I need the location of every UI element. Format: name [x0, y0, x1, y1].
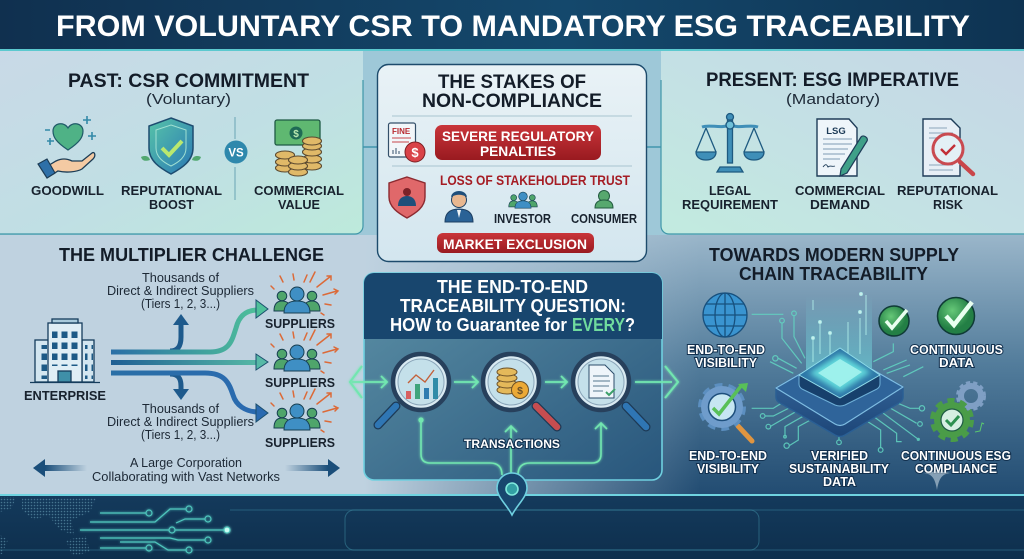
arrow: to lower suppliers: [111, 373, 268, 422]
panel: the multiplier challenge: [24, 245, 340, 484]
label: suppliers lower: SUPPLIERS: [265, 436, 335, 450]
panel: the stakes of non-compliance: [378, 64, 646, 262]
chart: central chip with circuit traces: [752, 292, 925, 452]
arrow: to upper suppliers: [111, 300, 268, 352]
callout: severe regulatory penalties: SEVERE REGULATORY: [442, 128, 595, 144]
text: thousands of suppliers, lower: (Tiers 1, 2, 3...): [141, 428, 220, 442]
icon: cash and coins: $: [293, 129, 299, 140]
circuit lines: [80, 506, 230, 553]
icon: fine document: [388, 123, 425, 162]
icon: fine document: $: [411, 145, 419, 160]
header band: [0, 0, 1024, 51]
label: end-to-end visibility lower: END-TO-END: [689, 449, 767, 463]
subheading: voluntary: (Voluntary): [146, 91, 231, 108]
arrow: right fade: [285, 459, 340, 477]
heading: loss of stakeholder trust: LOSS OF STAKEHOLDER TRUST: [440, 173, 631, 188]
arrow: branch up: [170, 314, 189, 351]
arrows: circuit feed from pin: [419, 418, 607, 475]
icon: cash and coins: [275, 120, 322, 176]
label: continuous ESG compliance: CONTINUOUS ESG: [901, 449, 1011, 463]
heading: stakes: THE STAKES OF: [438, 71, 586, 93]
heading: question: ?: [625, 315, 635, 335]
footer band: [0, 494, 1024, 559]
label: suppliers upper: SUPPLIERS: [265, 317, 335, 331]
panel: present ESG imperative: [661, 51, 1024, 234]
divider with VS badge: [224, 117, 248, 200]
panel: past CSR commitment: [0, 51, 363, 234]
heading: stakes: NON-COMPLIANCE: [422, 90, 602, 112]
label: verified sustainability data: VERIFIED: [811, 449, 868, 463]
label: commercial demand: DEMAND: [810, 198, 870, 212]
heading: question: EVERY: [572, 315, 625, 335]
label: investor: INVESTOR: [494, 212, 551, 226]
label: end-to-end visibility upper: END-TO-END: [687, 343, 765, 357]
panel: towards modern supply chain traceability: [687, 244, 1011, 490]
label: end-to-end visibility lower: VISIBILITY: [697, 462, 760, 476]
icon: suppliers group upper: [271, 272, 338, 315]
label: continuous data: DATA: [939, 356, 974, 370]
label: legal requirement: REQUIREMENT: [682, 198, 778, 212]
icon: magnifier with chart: [378, 354, 449, 425]
heading: past: PAST: CSR COMMITMENT: [68, 70, 309, 92]
callout: market exclusion: MARKET EXCLUSION: [443, 236, 587, 252]
label: continuous ESG compliance: COMPLIANCE: [915, 462, 997, 476]
label: reputational risk: REPUTATIONAL: [897, 184, 998, 198]
icon: fine document: FINE: [392, 127, 411, 136]
dotted world map: [0, 497, 96, 556]
icon: location pin: [497, 473, 527, 515]
icon: LSG document and pen: LSG: [826, 126, 846, 137]
heading: towards modern: CHAIN TRACEABILITY: [739, 263, 929, 284]
icon: suppliers group middle: [271, 330, 338, 373]
icon: heart in hand: [38, 116, 96, 178]
icon: faint marker: [924, 472, 950, 490]
text: thousands of suppliers, upper: (Tiers 1, 2, 3...): [141, 297, 220, 311]
text: a large corporation: A Large Corporation: [130, 456, 242, 470]
text: thousands of suppliers, upper: Thousands of: [142, 271, 220, 285]
arrow: left fade: [33, 459, 87, 477]
icon: scales of justice: [696, 114, 764, 172]
label: enterprise: ENTERPRISE: [24, 389, 106, 403]
arrow: to middle suppliers: [111, 354, 268, 370]
heading: question: HOW to Guarantee for: [390, 315, 567, 335]
label: reputational boost: REPUTATIONAL: [121, 184, 222, 198]
icon: green and grey gears: [934, 383, 984, 438]
connectors between top panels: [363, 146, 661, 148]
label: transactions: TRANSACTIONS: [464, 437, 560, 451]
icon: magnifier with coins: $: [517, 385, 523, 397]
title: FROM VOLUNTARY CSR TO MANDATORY ESG TRACEABILITY: [56, 10, 970, 43]
icon: globe: [703, 293, 747, 337]
label: commercial demand: COMMERCIAL: [795, 184, 885, 198]
text: thousands of suppliers, upper: Direct & Indirect Suppliers: [107, 284, 254, 298]
heading: question: TRACEABILITY QUESTION:: [400, 296, 626, 316]
label: commercial value: COMMERCIAL: [254, 184, 344, 198]
icon: magnifier with document: [573, 354, 646, 427]
arrow: branch down: [170, 374, 189, 400]
icon: large green check: [938, 298, 974, 334]
text: a large corporation: Collaborating with Vast Networks: [92, 470, 280, 484]
icon: business person: [445, 191, 473, 222]
callout: severe regulatory penalties: PENALTIES: [480, 143, 556, 159]
label: end-to-end visibility upper: VISIBILITY: [695, 356, 758, 370]
heading: multiplier challenge: THE MULTIPLIER CHALLENGE: [59, 245, 324, 265]
icon: suppliers group lower: [271, 389, 338, 432]
label: reputational risk: RISK: [933, 198, 963, 212]
heading: present: PRESENT: ESG IMPERATIVE: [706, 69, 959, 91]
label: goodwill: GOODWILL: [31, 184, 104, 198]
icon: shield with check: [141, 118, 201, 174]
label: verified sustainability data: DATA: [823, 475, 856, 489]
divider with VS badge: VS: [228, 148, 244, 160]
icon: consumer: [595, 190, 613, 208]
heading: towards modern: TOWARDS MODERN SUPPLY: [709, 244, 960, 265]
label: suppliers middle: SUPPLIERS: [265, 376, 335, 390]
label: verified sustainability data: SUSTAINABILITY: [789, 462, 890, 476]
icon: small green check: [879, 306, 909, 336]
label: consumer: CONSUMER: [571, 212, 637, 226]
icon: red shield with person: [389, 177, 425, 218]
heading: question: THE END-TO-END: [437, 277, 588, 297]
icon: investor group: [509, 192, 537, 208]
panel: end-to-end traceability question: [350, 273, 678, 515]
label: reputational boost: BOOST: [149, 198, 194, 212]
label: continuous data: CONTINUUOUS: [910, 343, 1003, 357]
icon: enterprise building: [30, 319, 100, 382]
callout: severe regulatory penalties: [435, 125, 601, 160]
label: legal requirement: LEGAL: [709, 184, 751, 198]
subheading: mandatory: (Mandatory): [786, 91, 880, 108]
text: thousands of suppliers, lower: Thousands of: [142, 402, 220, 416]
icon: magnifier with coins: [483, 354, 557, 427]
icon: document with magnifier: [923, 119, 973, 176]
label: commercial value: VALUE: [278, 198, 320, 212]
text: thousands of suppliers, lower: Direct & Indirect Suppliers: [107, 415, 254, 429]
arrows: green flow between magnifiers: [350, 366, 678, 398]
icon: gear with check and magnifier: [701, 383, 752, 441]
icon: LSG document and pen: [817, 119, 867, 176]
